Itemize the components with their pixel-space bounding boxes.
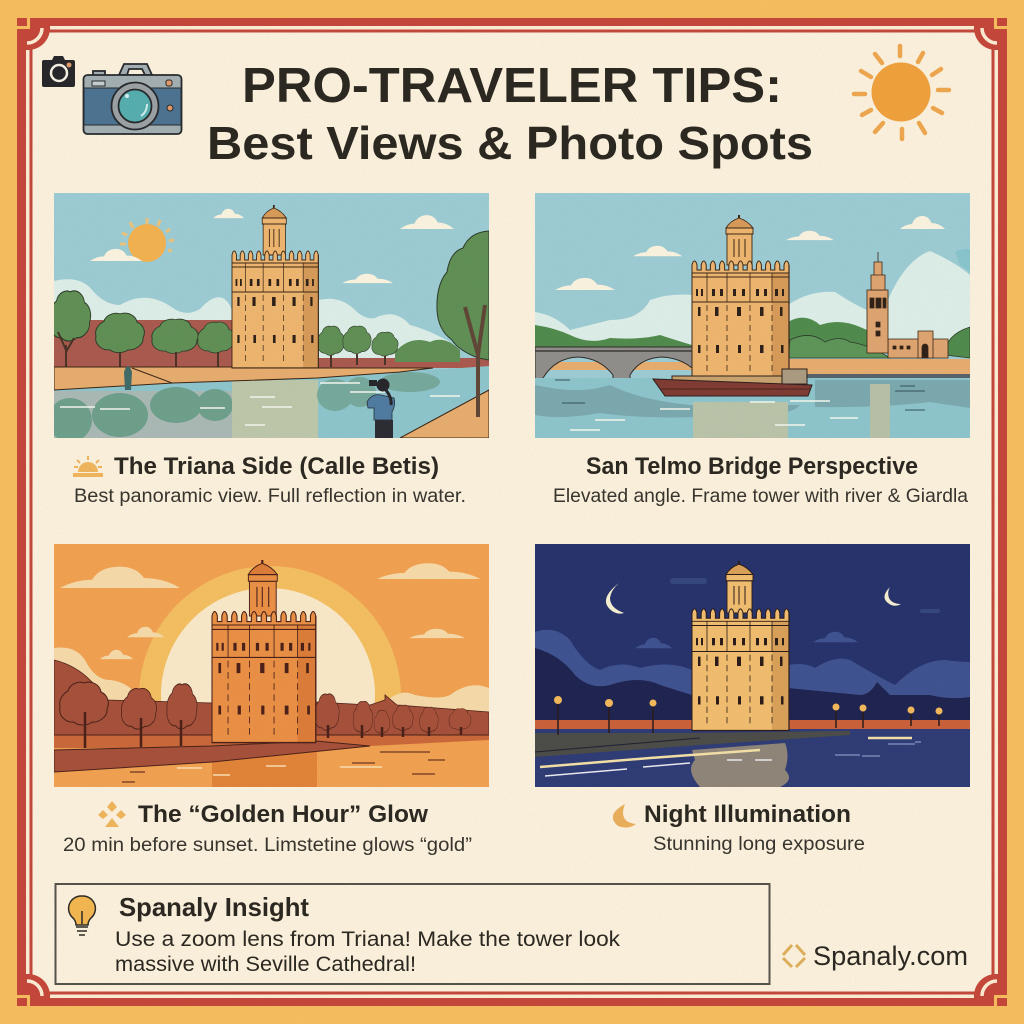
icon: crescent moon <box>613 804 636 828</box>
panel: San Telmo bridge illustration <box>535 193 970 438</box>
red wall <box>535 720 970 733</box>
corner ornament: bottom left <box>17 974 50 1006</box>
dark skyline <box>535 648 970 722</box>
water <box>535 729 970 787</box>
caption: night illumination <box>613 801 865 855</box>
icon: light bulb <box>69 896 95 935</box>
caption: Triana side <box>74 453 466 507</box>
panel: night illumination illustration <box>535 544 970 787</box>
icon: small black camera <box>42 56 75 87</box>
tower reflection <box>691 743 789 787</box>
reflections <box>535 380 970 438</box>
distant pale clouds <box>54 279 455 360</box>
sun disc <box>161 588 375 705</box>
icon: rising sun <box>74 456 102 476</box>
corner ornament: bottom right <box>974 974 1007 1006</box>
caption: golden hour: 20 min before sunset. Limstetine glows “gold” <box>63 835 472 856</box>
clouds <box>54 563 489 712</box>
sky <box>54 193 489 372</box>
caption: night illumination: Stunning long exposure <box>653 834 865 855</box>
caption: night illumination: Night Illumination <box>644 801 851 828</box>
callout: Spanaly Insight: Use a zoom lens from Triana! Make the tower look <box>115 928 621 951</box>
street lamps <box>554 696 942 735</box>
corner ornament: top right <box>974 18 1007 50</box>
photographer <box>367 378 395 438</box>
sun with rays <box>120 218 174 262</box>
title: Best Views & Photo Spots <box>207 117 813 169</box>
caption: San Telmo bridge <box>553 453 968 507</box>
hills <box>54 660 489 735</box>
icon: logo diamond <box>783 945 805 967</box>
near bank <box>400 390 489 438</box>
callout: Spanaly Insight: massive with Seville Cathedral! <box>115 953 416 976</box>
distant pale clouds <box>535 251 970 345</box>
corner ornament: top left <box>17 18 50 50</box>
far figure <box>124 366 172 390</box>
far bank <box>54 320 232 368</box>
caption: Triana side: The Triana Side (Calle Betis) <box>114 453 439 480</box>
ground band <box>54 735 489 748</box>
light streaks <box>540 738 921 776</box>
Giralda and cathedral <box>867 252 948 358</box>
tower <box>692 215 789 378</box>
bridge <box>535 346 692 378</box>
night sky <box>535 544 970 787</box>
tree lines <box>535 325 692 346</box>
barge <box>653 369 812 396</box>
water <box>535 378 970 438</box>
crescent moons <box>606 583 901 614</box>
clouds <box>535 630 970 700</box>
trees left <box>49 291 398 356</box>
water <box>54 366 489 438</box>
icon: large retro camera <box>84 64 182 134</box>
caption: golden hour <box>63 801 472 856</box>
clouds <box>90 209 454 283</box>
river bank <box>54 367 433 390</box>
sky <box>535 193 970 378</box>
callout: Spanaly Insight <box>56 884 770 984</box>
river <box>158 740 489 787</box>
clouds <box>555 216 945 290</box>
panel: Triana side illustration <box>48 193 489 442</box>
big tree <box>437 231 489 417</box>
near bank <box>54 741 370 772</box>
logo: Spanaly.com: Spanaly.com <box>813 941 968 971</box>
glints <box>177 766 382 775</box>
caption: San Telmo bridge: San Telmo Bridge Perspective <box>586 453 918 480</box>
caption: golden hour: The “Golden Hour” Glow <box>138 801 428 828</box>
caption: Triana side: Best panoramic view. Full reflection in water. <box>74 486 466 507</box>
trees <box>60 682 471 734</box>
title <box>207 59 813 169</box>
callout: Spanaly Insight: Spanaly Insight <box>119 892 309 922</box>
sun halo <box>139 566 401 703</box>
reflections <box>48 372 460 442</box>
caption: San Telmo bridge: Elevated angle. Frame tower with river & Giardla <box>553 486 968 507</box>
tower <box>212 560 316 743</box>
title: PRO-TRAVELER TIPS: <box>242 59 782 113</box>
walkway <box>535 731 850 757</box>
icon: sun <box>854 46 949 139</box>
tower <box>232 205 318 368</box>
sand embankment <box>788 359 970 374</box>
panel: golden hour illustration <box>54 544 489 787</box>
tower <box>692 561 789 731</box>
sky <box>54 544 489 750</box>
icon: sparkles <box>98 801 126 827</box>
